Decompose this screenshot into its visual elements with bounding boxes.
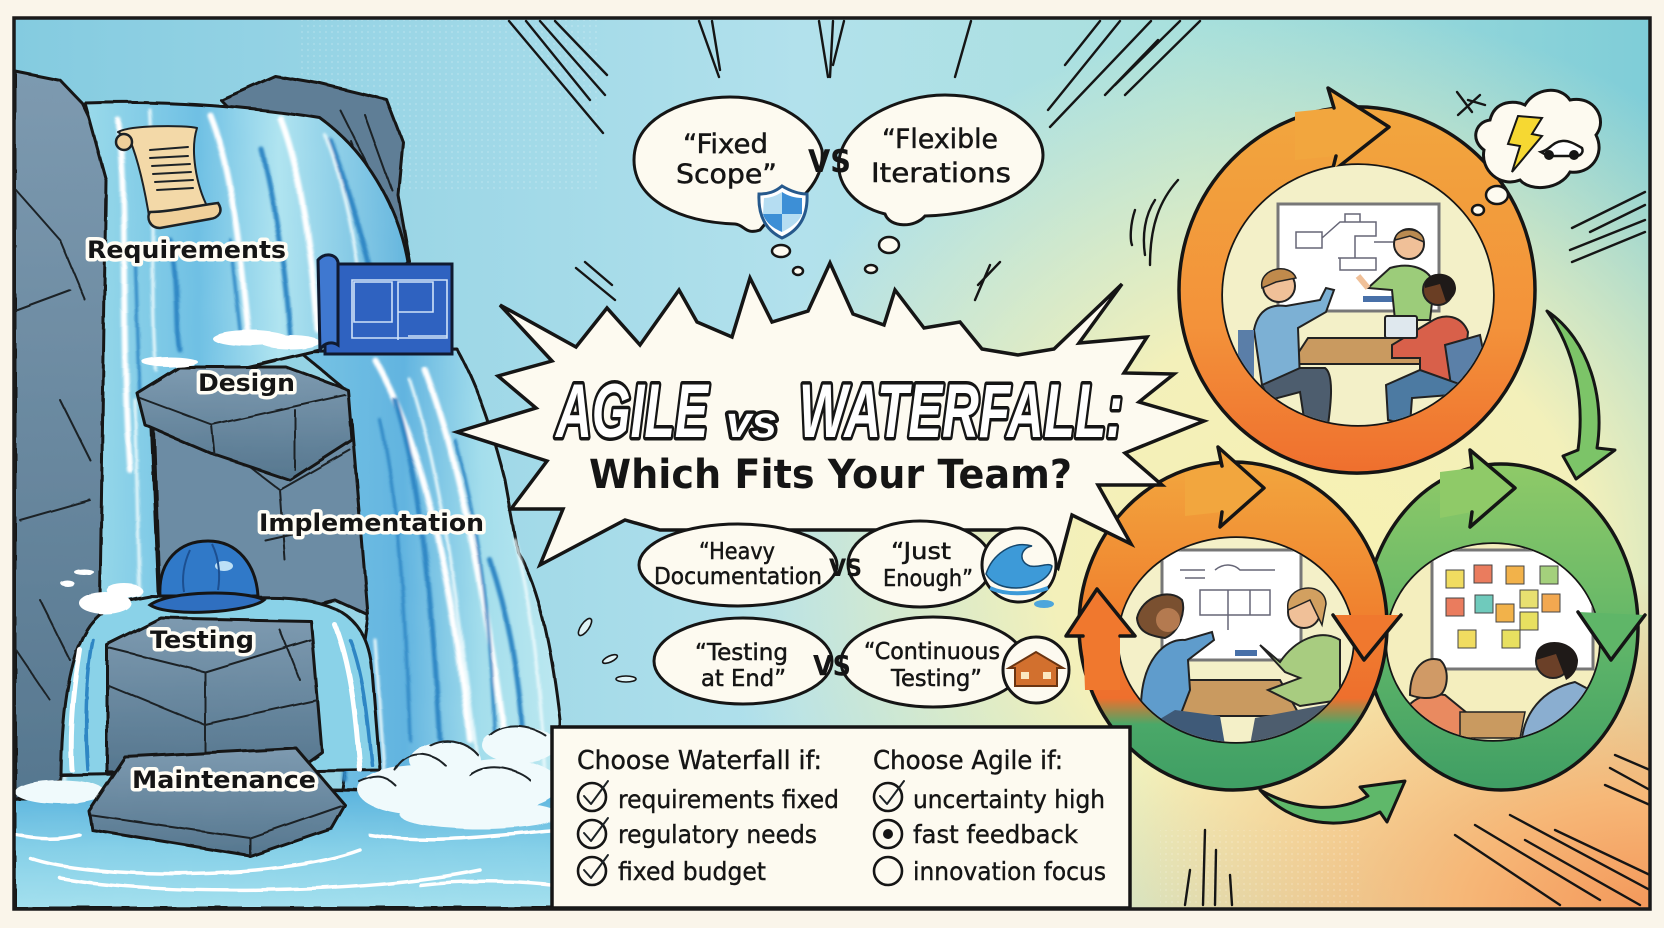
arrowhead top (1440, 450, 1515, 527)
label: Design: Design (198, 369, 295, 397)
lower fall (300, 349, 560, 810)
speech bubbles: testing: Testing” (890, 666, 982, 692)
title: AGILE vs WATERFALL: AGILE (555, 369, 710, 454)
panel: decision box (552, 727, 1130, 908)
subtitle: Which Fits Your Team? (589, 452, 1072, 498)
thought bubbles: fixed scope vs flexible iterations: “Flexible (882, 124, 998, 155)
speech bubbles: documentation: Enough” (883, 566, 973, 592)
icon: lightning (1508, 116, 1542, 172)
agile checklist: innovation focus (913, 857, 1106, 886)
waterfall checklist (577, 746, 839, 886)
panel: waterfall illustration (15, 71, 560, 908)
arrowhead left (1066, 589, 1135, 690)
table (1460, 712, 1525, 738)
foam on ledge (142, 330, 320, 367)
agile cycle: left ring (1066, 447, 1401, 790)
thought bubbles: fixed scope vs flexible iterations (634, 95, 1043, 275)
thought cloud: speed (1457, 90, 1601, 215)
icon: house (1003, 637, 1069, 703)
waterfall checklist: regulatory needs (618, 820, 817, 849)
scene: whiteboard discussion (1115, 535, 1360, 745)
agile cycle: top ring (1179, 88, 1535, 473)
splash drops (576, 617, 636, 682)
maintenance rock (89, 748, 345, 856)
waterfall checklist: requirements fixed (618, 785, 839, 814)
thought bubbles: fixed scope vs flexible iterations: “Fixed (683, 129, 768, 160)
title starburst (457, 263, 1204, 568)
speech bubbles: documentation (639, 521, 1056, 608)
title: AGILE vs WATERFALL: vs (726, 398, 777, 447)
speech bubbles: documentation: “Heavy (699, 539, 775, 565)
title: AGILE vs WATERFALL: WATERFALL: (799, 369, 1123, 454)
title: AGILE vs WATERFALL (555, 369, 1123, 454)
man (1250, 588, 1345, 745)
agile checklist: fast feedback (913, 820, 1078, 849)
water streaks (64, 110, 545, 780)
foam at base (15, 726, 560, 829)
back rock (221, 76, 410, 262)
arrowhead (1295, 88, 1389, 172)
arrowhead right (1578, 612, 1645, 660)
testing fall (61, 596, 380, 775)
speech bubbles: testing: VS (813, 649, 851, 682)
icon: hard hat (150, 541, 264, 612)
waterfall checklist: Choose Waterfall if: (577, 746, 822, 776)
thought bubbles: fixed scope vs flexible iterations: Scope” (676, 159, 777, 190)
icon: blueprint (318, 255, 452, 354)
label: Maintenance: Maintenance (132, 766, 316, 794)
agile checklist: Choose Agile if: (873, 746, 1063, 776)
woman (1409, 658, 1471, 738)
speech bubbles: documentation: “Just (891, 539, 951, 565)
label: Requirements: Requirements (87, 236, 286, 264)
pool (15, 790, 556, 908)
arrow: curved green right (1547, 311, 1615, 479)
speech bubbles: testing: “Testing (695, 640, 788, 666)
left person (1238, 269, 1334, 425)
speed lines: top (509, 21, 1200, 300)
arrowhead right (1333, 615, 1401, 660)
speech bubbles: documentation: Documentation (654, 564, 822, 590)
agile checklist (873, 746, 1106, 886)
speed lines: right and bottom (1131, 180, 1650, 905)
agile checklist: uncertainty high (913, 785, 1105, 814)
table (1183, 679, 1298, 717)
rock below design ledge (154, 420, 368, 620)
icon: wave (982, 528, 1056, 608)
speech bubbles: testing: “Continuous (864, 639, 1000, 665)
woman (1137, 594, 1225, 745)
speech bubbles: documentation: VS (829, 554, 862, 582)
left cliff (15, 71, 108, 800)
green person (1358, 229, 1434, 320)
thought bubbles: fixed scope vs flexible iterations: VS (808, 144, 851, 180)
halftone texture (300, 20, 1360, 908)
table (1291, 338, 1432, 364)
scene: planning team (1220, 160, 1500, 430)
arrow: curved green bottom (1260, 781, 1405, 823)
icon: scroll (116, 126, 220, 228)
design ledge (137, 367, 352, 480)
label: Implementation: Implementation (259, 509, 484, 537)
agile cycle: right ring (1364, 450, 1645, 790)
arrowhead top (1185, 447, 1264, 527)
speech bubbles: testing (654, 617, 1069, 707)
scene: sticky notes (1380, 540, 1605, 745)
thought bubbles: fixed scope vs flexible iterations: Iterations (871, 158, 1011, 189)
foam at testing (61, 569, 143, 614)
icon: car (1541, 141, 1583, 160)
icon: shield (759, 186, 807, 238)
speech bubbles: testing: at End” (701, 666, 786, 692)
label: Testing: Testing (150, 626, 254, 654)
testing rock (107, 618, 322, 772)
upper fall (85, 102, 408, 650)
right person (1385, 274, 1490, 425)
man (1522, 642, 1590, 740)
waterfall checklist: fixed budget (618, 857, 766, 886)
